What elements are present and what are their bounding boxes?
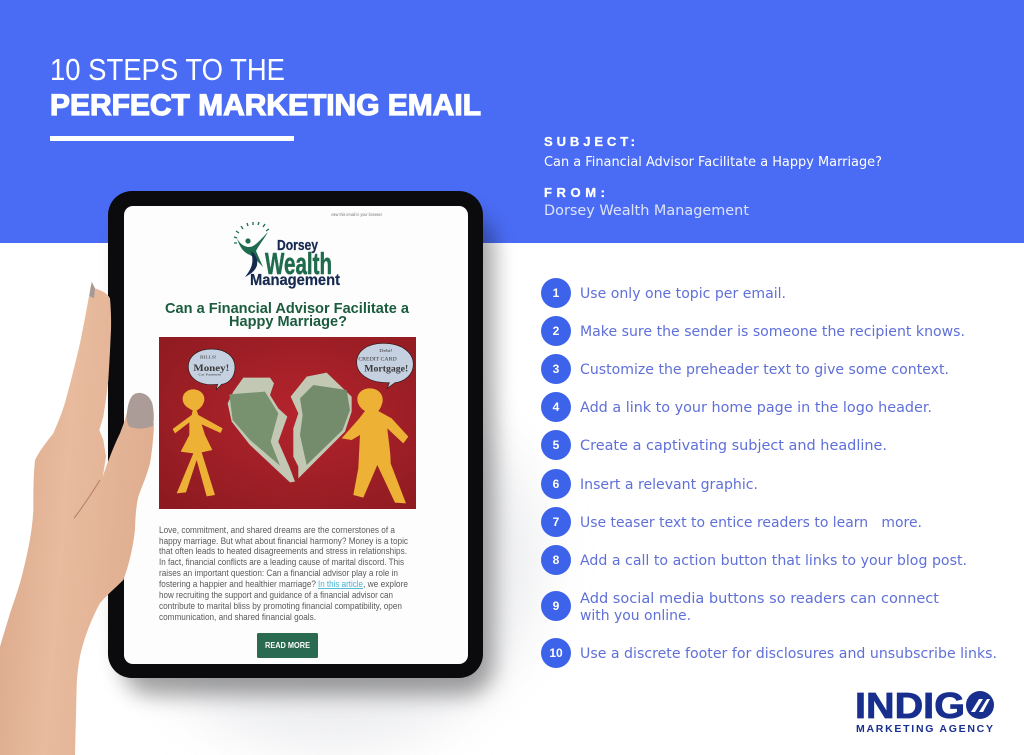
- knuckle crease: [74, 480, 100, 518]
- step 9: [541, 591, 940, 624]
- body line 5: raises an important question: Can a financial advisor play a role in: [159, 568, 398, 578]
- step 9: 9: [553, 599, 560, 613]
- step 4: Add a link to your home page in the logo header.: [580, 400, 932, 416]
- right speech bubble: [357, 343, 413, 388]
- title: [50, 52, 481, 141]
- step 1: Use only one topic per email.: [580, 286, 786, 302]
- email body copy: [159, 525, 408, 622]
- dollar heart left half: [228, 378, 295, 482]
- step 10: Use a discrete footer for disclosures and unsubscribe links.: [580, 646, 997, 662]
- step 3: Customize the preheader text to give some context.: [580, 362, 949, 378]
- header band: [0, 0, 1024, 243]
- red background: [159, 337, 416, 509]
- step 9: with you online.: [580, 608, 691, 624]
- step 9: Add social media buttons so readers can connect: [580, 591, 940, 607]
- right bubble text: Debt!: [379, 349, 393, 353]
- step 3: [541, 354, 949, 384]
- body line 1: Love, commitment, and shared dreams are the cornerstones of a: [159, 525, 395, 535]
- title line 2: PERFECT MARKETING EMAIL: [50, 89, 481, 122]
- left bubble text: Car Payment: [198, 373, 221, 377]
- email hero image: [159, 337, 416, 509]
- subject text: Can a Financial Advisor Facilitate a Happy Marriage?: [544, 154, 882, 170]
- email logo: [234, 222, 341, 289]
- thumb nail: [127, 393, 154, 429]
- body line 6: fostering a happier and healthier marriage?: [159, 579, 316, 589]
- step 3: 3: [553, 362, 560, 376]
- step 4: [541, 392, 932, 422]
- subject label: SUBJECT:: [544, 134, 635, 149]
- step 5: [541, 430, 887, 460]
- logo word Dorsey: Dorsey: [277, 238, 318, 254]
- body line 8: contribute to marital bliss by promoting financial compatibility, open: [159, 601, 402, 611]
- step 1: [541, 278, 786, 308]
- tablet body: [108, 191, 483, 678]
- tablet shadow: [122, 215, 494, 695]
- body line 2: happy marriage. But what about financial harmony? Money is a topic: [159, 536, 408, 546]
- step 7: [541, 507, 922, 537]
- step 1: 1: [553, 286, 560, 300]
- step 8: [541, 545, 967, 575]
- article link: In this article: [318, 579, 363, 589]
- title underline: [50, 136, 294, 141]
- palm and fingers: [0, 282, 154, 755]
- hand holding tablet: [0, 282, 154, 755]
- from label: FROM:: [544, 185, 605, 200]
- step 10: 10: [549, 646, 563, 660]
- step 10: [541, 638, 997, 668]
- step 6: Insert a relevant graphic.: [580, 477, 758, 493]
- logo wordmark: INDIG: [855, 685, 965, 726]
- right bubble text: [358, 349, 408, 374]
- button background: [257, 633, 318, 658]
- Indigo Marketing Agency logo: [855, 685, 994, 735]
- step 2: [541, 316, 965, 346]
- step 6: 6: [553, 477, 560, 491]
- step 5: 5: [553, 438, 560, 452]
- logo word Wealth: Wealth: [265, 246, 332, 281]
- step 7: Use teaser text to entice readers to learn more.: [580, 515, 922, 531]
- step 8: 8: [553, 553, 560, 567]
- title line 1: 10 STEPS TO THE: [50, 52, 285, 87]
- logo figure: [234, 222, 269, 277]
- body line 9: communication, and shared financial goals.: [159, 612, 316, 622]
- subject block: [544, 134, 882, 219]
- left bubble text: Money!: [193, 363, 229, 374]
- step 6: [541, 469, 758, 499]
- body line 4: In fact, financial conflicts are a leading cause of marital discord. This: [159, 557, 404, 567]
- paper woman: [173, 389, 223, 496]
- tablet screen: [124, 206, 468, 664]
- dollar heart left print: [229, 392, 280, 466]
- step 8: Add a call to action button that links to your blog post.: [580, 553, 967, 569]
- headline line 1: Can a Financial Advisor Facilitate a: [165, 300, 410, 317]
- index fingernail: [89, 282, 95, 298]
- logo tagline: MARKETING AGENCY: [856, 723, 993, 735]
- right bubble text: Mortgage!: [364, 364, 408, 374]
- dollar heart right half: [291, 373, 352, 478]
- numbered steps: [541, 278, 997, 668]
- left speech bubble: [188, 349, 235, 390]
- dollar heart right print: [300, 385, 350, 465]
- step 4: 4: [553, 400, 560, 414]
- logo word Management: Management: [250, 272, 341, 289]
- right bubble text: CREDIT CARD: [358, 358, 397, 363]
- step 5: Create a captivating subject and headline.: [580, 438, 887, 454]
- paper man: [342, 388, 408, 503]
- step 2: 2: [553, 324, 560, 338]
- read more button: [257, 633, 318, 658]
- logo circle mark: [966, 691, 994, 719]
- headline line 2: Happy Marriage?: [229, 313, 347, 330]
- from text: Dorsey Wealth Management: [544, 203, 749, 219]
- body line 3: that often leads to heated disagreements and stress in relationships.: [159, 546, 407, 556]
- email headline: [165, 300, 410, 330]
- left bubble text: BILLS!: [200, 356, 217, 360]
- body line 6 end: , we explore: [363, 579, 408, 589]
- button label: READ MORE: [265, 641, 311, 650]
- tablet: [108, 191, 483, 678]
- soft background shading: [120, 370, 540, 750]
- step 7: 7: [553, 515, 560, 529]
- left bubble text: [193, 356, 229, 377]
- body line 7: how recruiting the support and guidance of a financial advisor can: [159, 590, 393, 600]
- browser link: view this email in your browser: [331, 212, 383, 217]
- step 2: Make sure the sender is someone the recipient knows.: [580, 324, 965, 340]
